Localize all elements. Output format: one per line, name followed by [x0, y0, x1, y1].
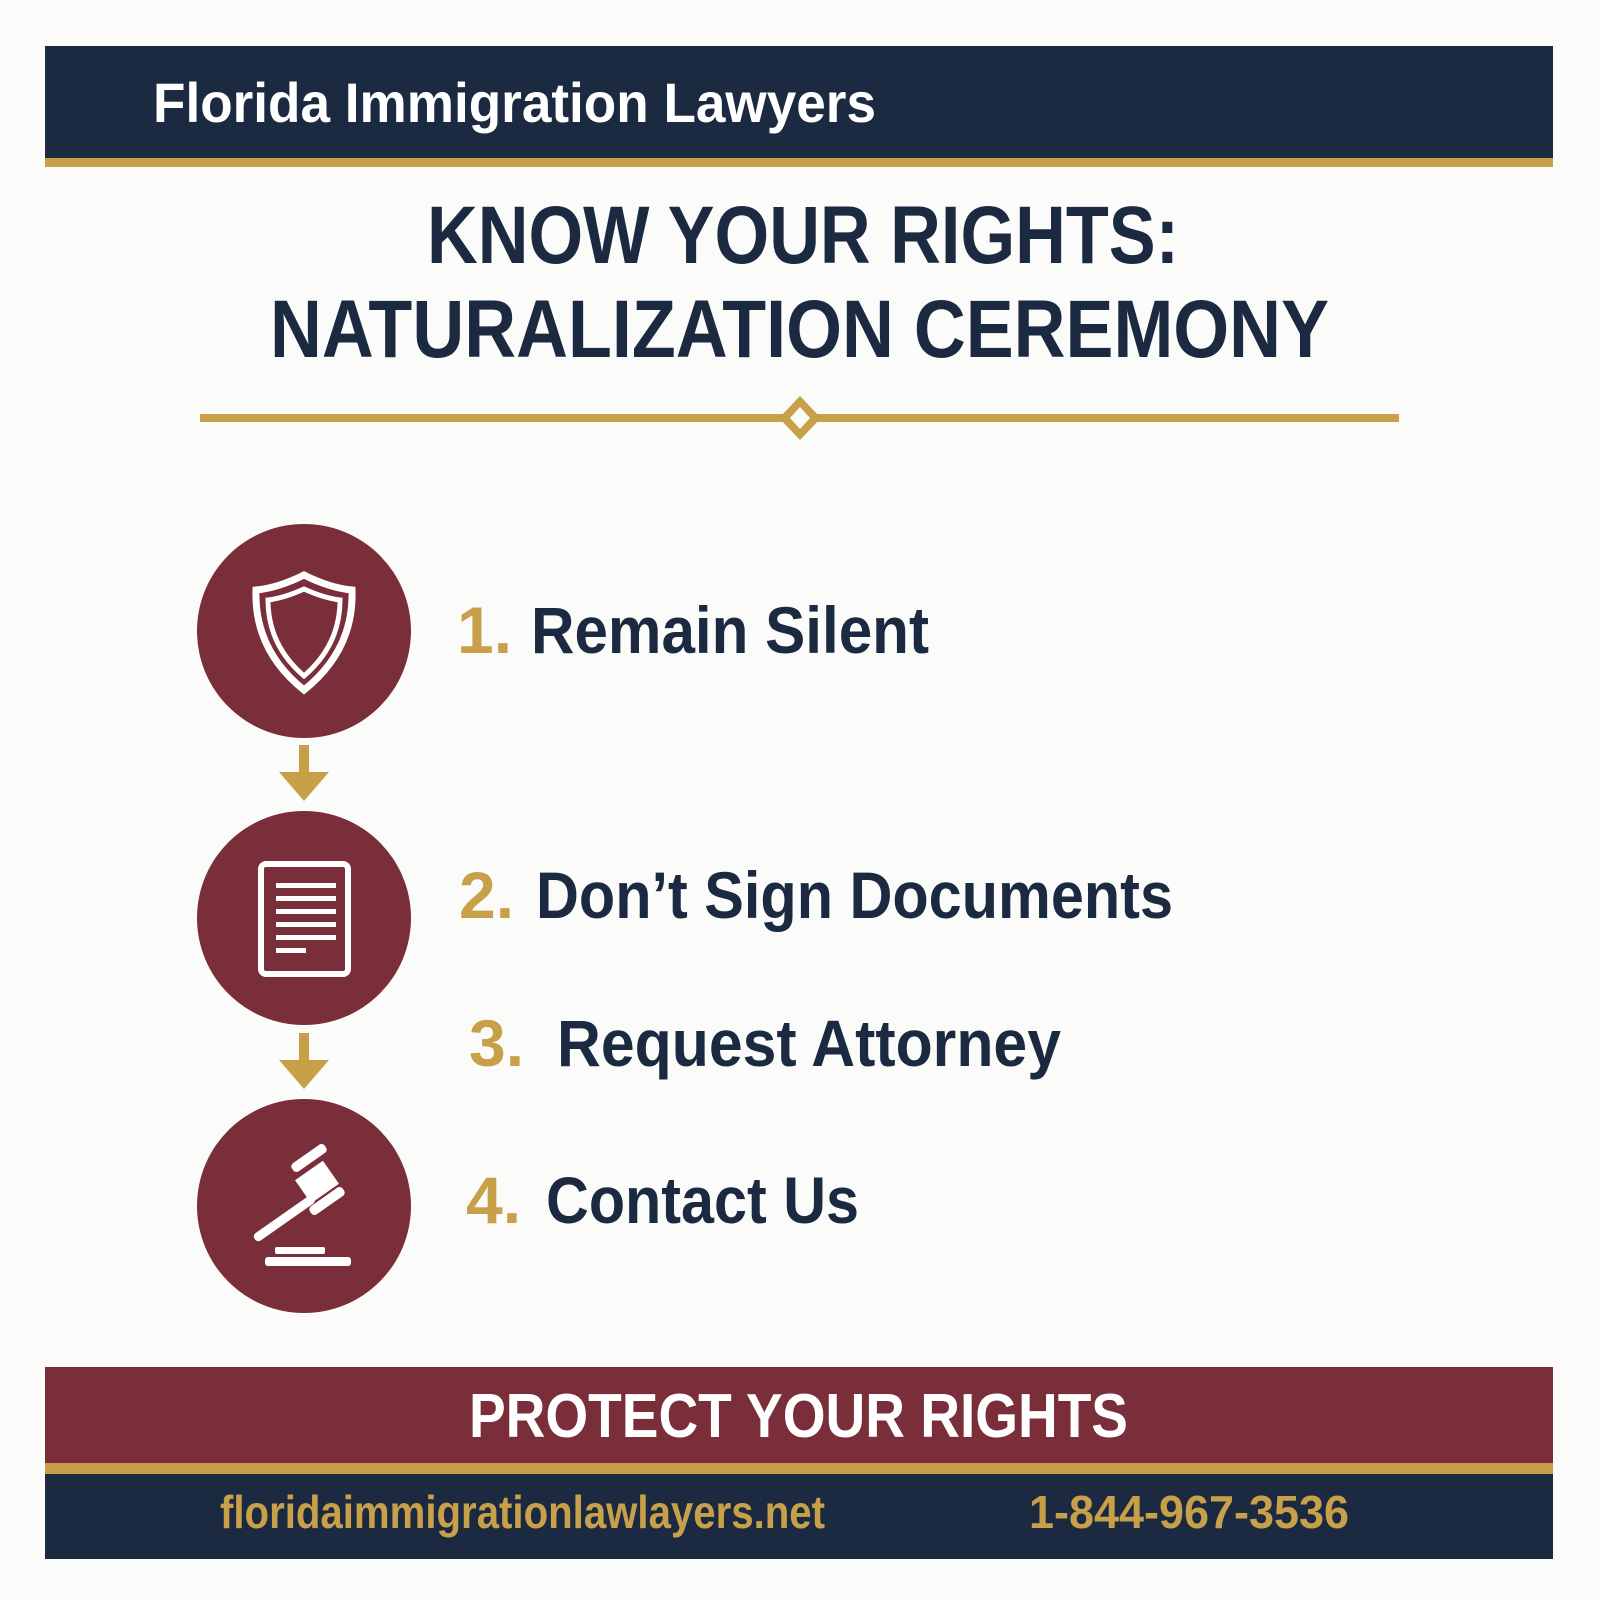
arrow 2 — [279, 1033, 329, 1089]
step 2 text: Don’t Sign Documents — [536, 858, 1173, 932]
header bar — [45, 46, 1553, 167]
step 2 icon: document — [197, 811, 411, 1025]
step 1 text: 1. — [457, 593, 512, 667]
step 3 text: Request Attorney — [557, 1006, 1061, 1080]
step 1 text: Remain Silent — [531, 593, 929, 667]
phone: 1-844-967-3536 — [1029, 1486, 1349, 1538]
contact bar — [45, 1463, 1553, 1559]
step 3 text: 3. — [469, 1006, 524, 1080]
footer banner — [45, 1367, 1553, 1463]
website: floridaimmigrationlawlayers.net — [220, 1486, 825, 1538]
main title — [270, 190, 1329, 375]
step 1 icon: shield — [197, 524, 411, 738]
footer heading: PROTECT YOUR RIGHTS — [469, 1382, 1128, 1451]
step 2 text: 2. — [459, 858, 514, 932]
divider with diamond — [200, 396, 1399, 440]
arrow 1 — [279, 745, 329, 801]
step 4 icon: gavel — [197, 1099, 411, 1313]
main title: KNOW YOUR RIGHTS: — [427, 190, 1179, 281]
step 4 text: Contact Us — [546, 1163, 859, 1237]
header title: Florida Immigration Lawyers — [153, 71, 876, 134]
main title: NATURALIZATION CEREMONY — [270, 284, 1329, 375]
step 4 text: 4. — [466, 1163, 521, 1237]
